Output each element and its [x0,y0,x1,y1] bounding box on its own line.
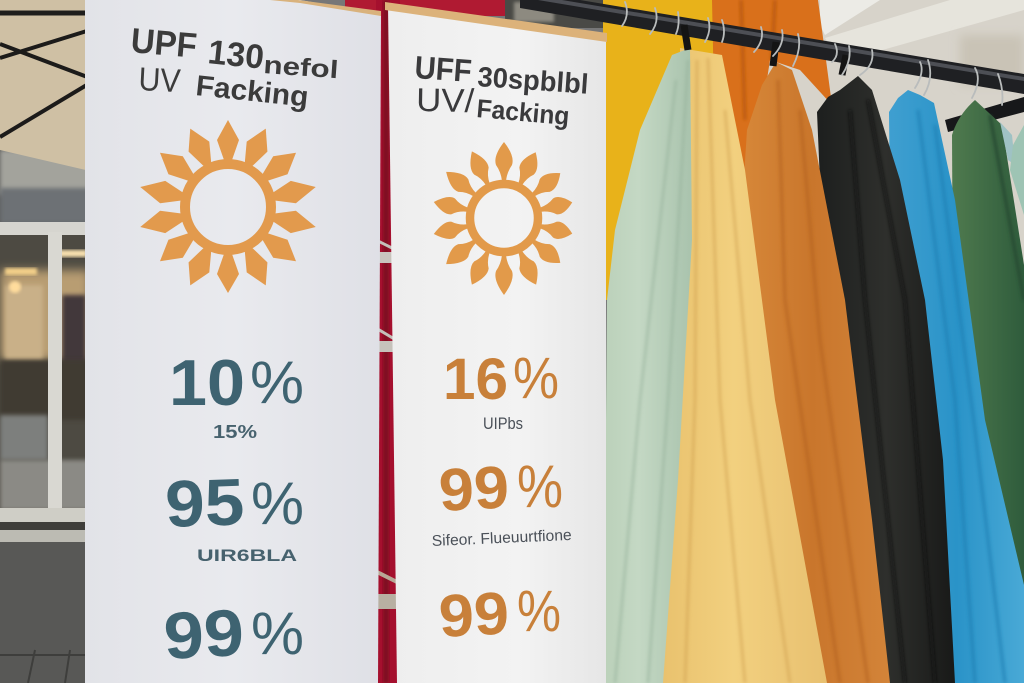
right stat caption UIPbs: UIPbs [483,414,523,433]
left banner title: 130 [206,33,266,77]
left stat caption 15%: 15% [213,422,257,442]
right stat caption Sifeor. Flueuurtfione: Sifeor. Flueuurtfione [431,527,572,550]
left stat 95%: % [251,470,304,537]
left stat 10%: 10 [169,346,245,419]
right banner title: 30spblbl [477,61,589,100]
right banner title: Facking [475,93,571,131]
left stat 99% [162,595,304,673]
left stat 99%: 99 [162,595,246,673]
right stat 99%: 99 [437,453,511,524]
curtain hooks [622,2,1002,105]
lower back rail [945,97,1024,132]
right stat 99% [437,453,563,524]
right banner title: UV/ [416,81,475,119]
left banner title [129,21,339,114]
left stat caption UIR6BLA: UIR6BLA [197,546,297,565]
right banner rod [385,2,607,42]
left stat 95%: 95 [164,464,245,541]
red backdrop between banners [345,0,605,683]
left banner title: nefol [263,51,339,84]
left stat 95% [164,464,304,541]
left stat 99%: % [251,600,304,667]
orange tan fabric [735,62,890,683]
clothes rail [520,0,1024,94]
right stat 16%: % [513,346,559,411]
right banner title: UFF [414,49,473,89]
yellow and orange back fabrics [603,0,832,300]
right banner [385,2,607,683]
left stat 10% [169,346,304,419]
right banner sun icon [432,142,574,295]
left banner title: UPF [129,21,198,66]
left stat 10%: % [250,349,304,416]
left banner [85,0,381,683]
left banner rod [270,0,381,16]
left banner sun icon [138,120,318,293]
left banner title: UV [138,60,182,99]
black fabric [817,76,955,683]
right stat 16% [443,346,559,412]
right stat 99% lower: % [517,579,561,644]
blue fabric [889,90,1024,683]
left banner title: Facking [194,70,310,114]
right stat 99% lower: 99 [437,579,511,650]
right stat 99% lower [437,579,561,650]
awning with black frame [0,0,90,171]
cream yellow fabric [640,48,827,683]
right stat 16%: 16 [443,347,508,412]
right stat 99%: % [517,453,563,520]
background: pale building at right [700,0,1024,683]
right banner title [414,49,589,131]
mint green fabric [585,48,692,683]
background: storefront at left [0,0,90,683]
green fabric [952,100,1024,683]
